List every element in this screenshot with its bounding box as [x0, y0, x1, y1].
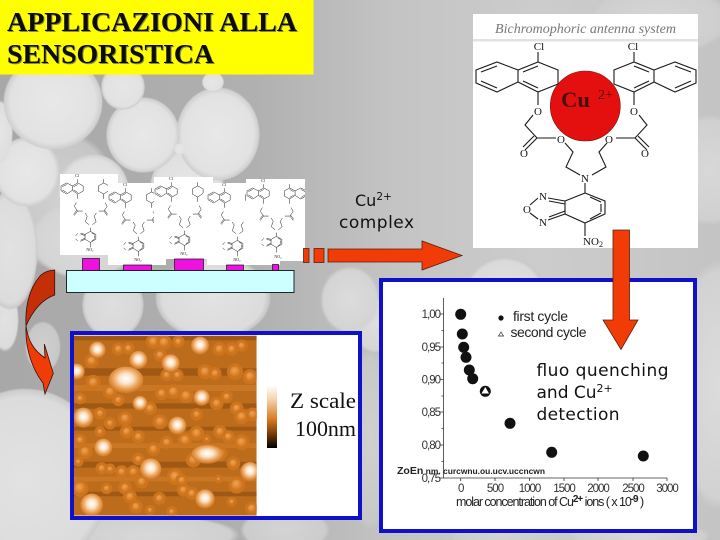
- y axis labels: 0,75: [422, 473, 441, 485]
- 100nm label: 100nm: [295, 416, 356, 441]
- molecule 3: NO₂: [180, 251, 188, 256]
- x axis labels: 0: [458, 483, 464, 495]
- Cu2+ complex label: Cu: [355, 191, 376, 210]
- y axis labels: 1,00: [422, 309, 441, 321]
- molecule structure: O: [523, 204, 531, 216]
- molecule 2: NO₂: [134, 257, 142, 262]
- x axis labels: 2000: [587, 483, 609, 495]
- molecule 5: NO₂: [274, 254, 282, 259]
- arrow: right to antenna system: [304, 241, 462, 270]
- molecule 1: [60, 173, 118, 255]
- panel: quenching chart: [381, 280, 695, 531]
- molecule structure: O: [557, 134, 565, 146]
- x axis title: ): [638, 495, 644, 509]
- panel: AFM image: [69, 333, 360, 518]
- y axis labels: 0,80: [422, 440, 441, 452]
- molecule structure: Cl: [628, 41, 638, 53]
- y axis labels: [422, 309, 441, 485]
- x axis title: molar concentration of Cu: [456, 495, 573, 509]
- molecule 4: [207, 182, 265, 265]
- molecule 4: Cl: [222, 182, 227, 187]
- molecule structure: [476, 41, 696, 249]
- arrow: down to chart: [603, 230, 638, 350]
- copper ion circle: [550, 71, 620, 141]
- x axis labels: 2500: [622, 483, 644, 495]
- molecule structure: O: [630, 106, 638, 118]
- fluo quenching callout: fluo quenching: [536, 361, 668, 381]
- y axis labels: 0,95: [422, 342, 441, 354]
- molecule 3: Cl: [169, 176, 174, 181]
- Z scale colour bar: [267, 385, 277, 448]
- molecule structure: N: [539, 217, 547, 229]
- AFM surface image: [69, 336, 260, 516]
- molecule structure: N: [581, 173, 589, 185]
- molecule structure: O: [605, 134, 613, 146]
- molecule structure: N: [539, 191, 547, 203]
- molecule structure: NO: [583, 236, 599, 248]
- molecule 5: Cl: [261, 178, 266, 183]
- Cu2+ complex label: 2+: [376, 191, 392, 203]
- molecule 2: Cl: [123, 182, 128, 187]
- y axis labels: 0,85: [422, 407, 441, 419]
- Z scale label: Z scale: [290, 388, 356, 413]
- x axis title: 2+: [573, 494, 583, 505]
- molecule structure: O: [641, 148, 649, 160]
- chart axes: [440, 298, 667, 481]
- molecule 1: NO₂: [86, 247, 94, 252]
- y axis labels: 0,90: [422, 374, 441, 386]
- data points: [455, 309, 649, 462]
- panel: bichromophoric antenna system molecule: [473, 14, 698, 249]
- arrow: curved down to AFM image: [26, 270, 55, 394]
- legend: second cycle: second cycle: [510, 324, 587, 340]
- x axis labels: 1000: [519, 483, 541, 495]
- copper ion circle: 2+: [598, 88, 613, 103]
- title text: [7, 7, 298, 69]
- molecule structure: O: [520, 148, 528, 160]
- copper ion circle: Cu: [561, 87, 590, 112]
- molecule 2: [108, 182, 166, 265]
- second cycle data marker: [482, 387, 489, 394]
- fluo quenching callout: [536, 361, 668, 425]
- fluo quenching callout: detection: [536, 405, 620, 425]
- substrate with magenta deposits: [66, 258, 294, 292]
- title box: [0, 0, 314, 74]
- molecule structure: O: [534, 106, 542, 118]
- x axis labels: 500: [487, 483, 504, 495]
- legend: first cycle: first cycle: [513, 308, 568, 324]
- complex label second line: complex: [339, 213, 414, 233]
- title text: APPLICAZIONI ALLA: [7, 7, 298, 37]
- molecule 4: NO₂: [233, 257, 241, 262]
- fluo quenching callout: 2+: [597, 382, 613, 395]
- x axis labels: [458, 483, 678, 495]
- fluo quenching callout: and Cu: [536, 383, 597, 403]
- x axis labels: 1500: [553, 483, 575, 495]
- molecule 3: [154, 176, 213, 259]
- molecule structure: 2: [599, 240, 603, 249]
- molecule 5: [246, 178, 306, 265]
- molecule structure: Cl: [534, 41, 544, 53]
- title text: SENSORISTICA: [7, 39, 215, 69]
- x axis title: ions ( x 10: [582, 495, 632, 509]
- surface-bound molecules: [60, 173, 306, 265]
- x axis labels: 3000: [656, 483, 678, 495]
- x axis title: -9: [631, 494, 639, 505]
- molecule 1: Cl: [75, 173, 80, 178]
- panel heading: Bichromophoric antenna system: [495, 21, 676, 36]
- garbled overlay text: ZoEn nm. curcwnu.ou.ucv.uccncwn: [397, 466, 545, 477]
